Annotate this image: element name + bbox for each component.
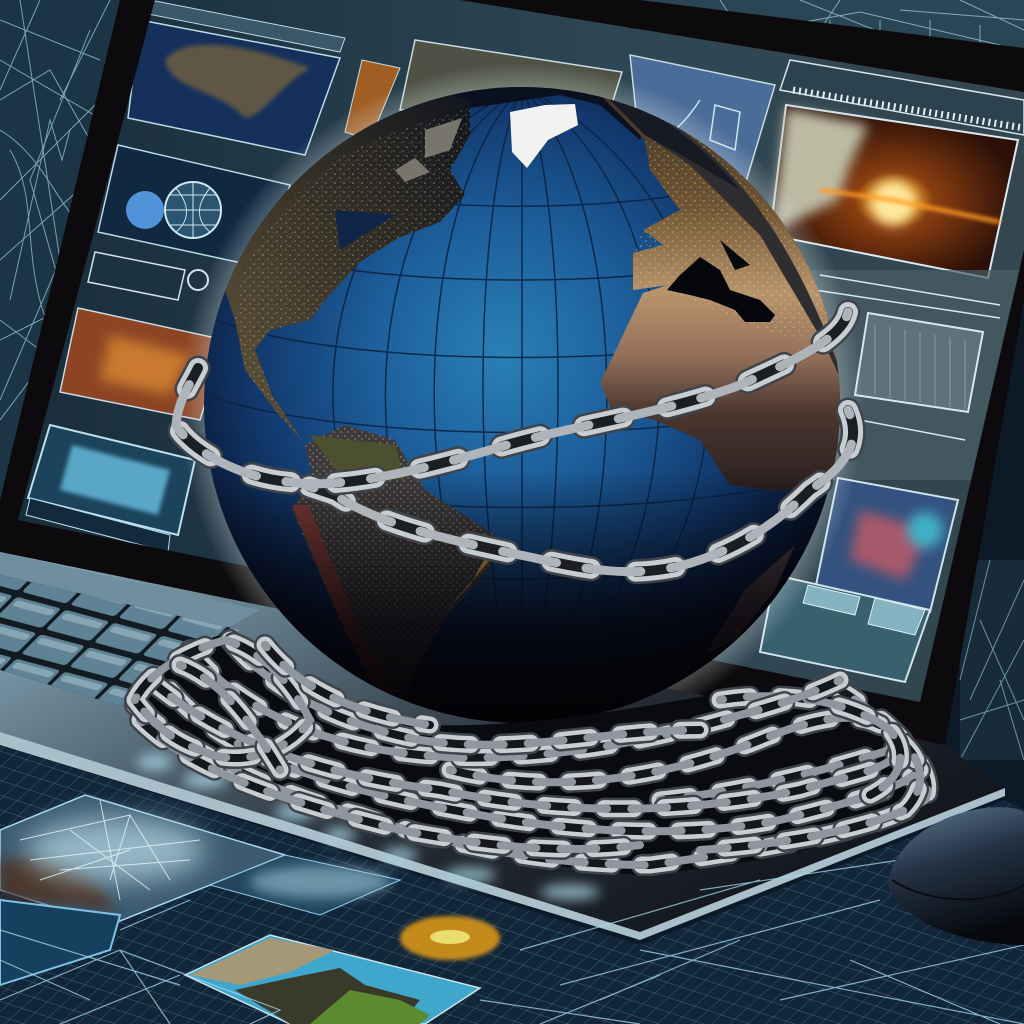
chain ring: top: [230, 640, 700, 745]
globe grid lines: [205, 98, 808, 612]
chain ring: front left: [140, 720, 640, 849]
laptop screen with interface panels: [0, 0, 1024, 720]
continent: Africa and Eurasia: [600, 98, 840, 490]
panel: grey monitor: [808, 270, 1024, 480]
continent: South America: [292, 425, 495, 715]
chain ring: outer: [170, 690, 920, 831]
panel: top centre tan: [400, 40, 622, 110]
panel: cyan interface: [26, 425, 195, 552]
globe: [204, 87, 840, 723]
chain ring: middle: [150, 680, 900, 809]
desk panel: orange sun: [400, 916, 500, 960]
dark polar cap: [396, 87, 646, 140]
panel: teal interface, lower right: [760, 575, 930, 682]
desk: digital network surface: [0, 745, 1024, 1024]
continent: Madagascar and southern Africa: [705, 545, 795, 655]
panel: orange heat map: [60, 308, 225, 420]
panel: planet and wireframe globe: [98, 145, 290, 268]
panel: colourful map: [815, 478, 958, 612]
chain wrapped around the globe: upper strand: [176, 312, 848, 484]
desk panel: mountain landscape: [185, 935, 480, 1024]
laptop lid: black bezel: [0, 0, 1024, 745]
desk panel: blue interface: [0, 900, 120, 985]
panel: top centre orange: [345, 60, 400, 140]
chain wrapped around the globe: lower strand: [290, 410, 853, 572]
chain cluster: left loop: [135, 640, 430, 770]
chain ring: back right: [720, 696, 900, 795]
panel: space map, top left: [128, 0, 345, 155]
panel: sunburst: [770, 60, 1024, 278]
shadows under the chain pile: [137, 753, 600, 900]
laptop base with keyboard: [0, 552, 1005, 940]
chain pile at base of the globe: [130, 632, 935, 875]
panel: status bar: [88, 252, 208, 300]
continent: Greenland: [510, 104, 578, 168]
globe underside shading: [217, 479, 822, 723]
chain ring: right bundle: [660, 745, 920, 850]
chain ring: lower: [135, 690, 928, 865]
desk panel: network: [210, 855, 400, 915]
chain ring: centre: [450, 718, 880, 782]
continent: North America: [225, 95, 470, 442]
chain ring: upper: [190, 650, 840, 758]
panel: top centre blue wireframe: [630, 55, 775, 185]
desk panel: network burst: [0, 795, 285, 925]
keyboard: [0, 575, 240, 706]
icon: computer mouse: [888, 807, 1024, 945]
glow behind the globe: [180, 63, 864, 747]
